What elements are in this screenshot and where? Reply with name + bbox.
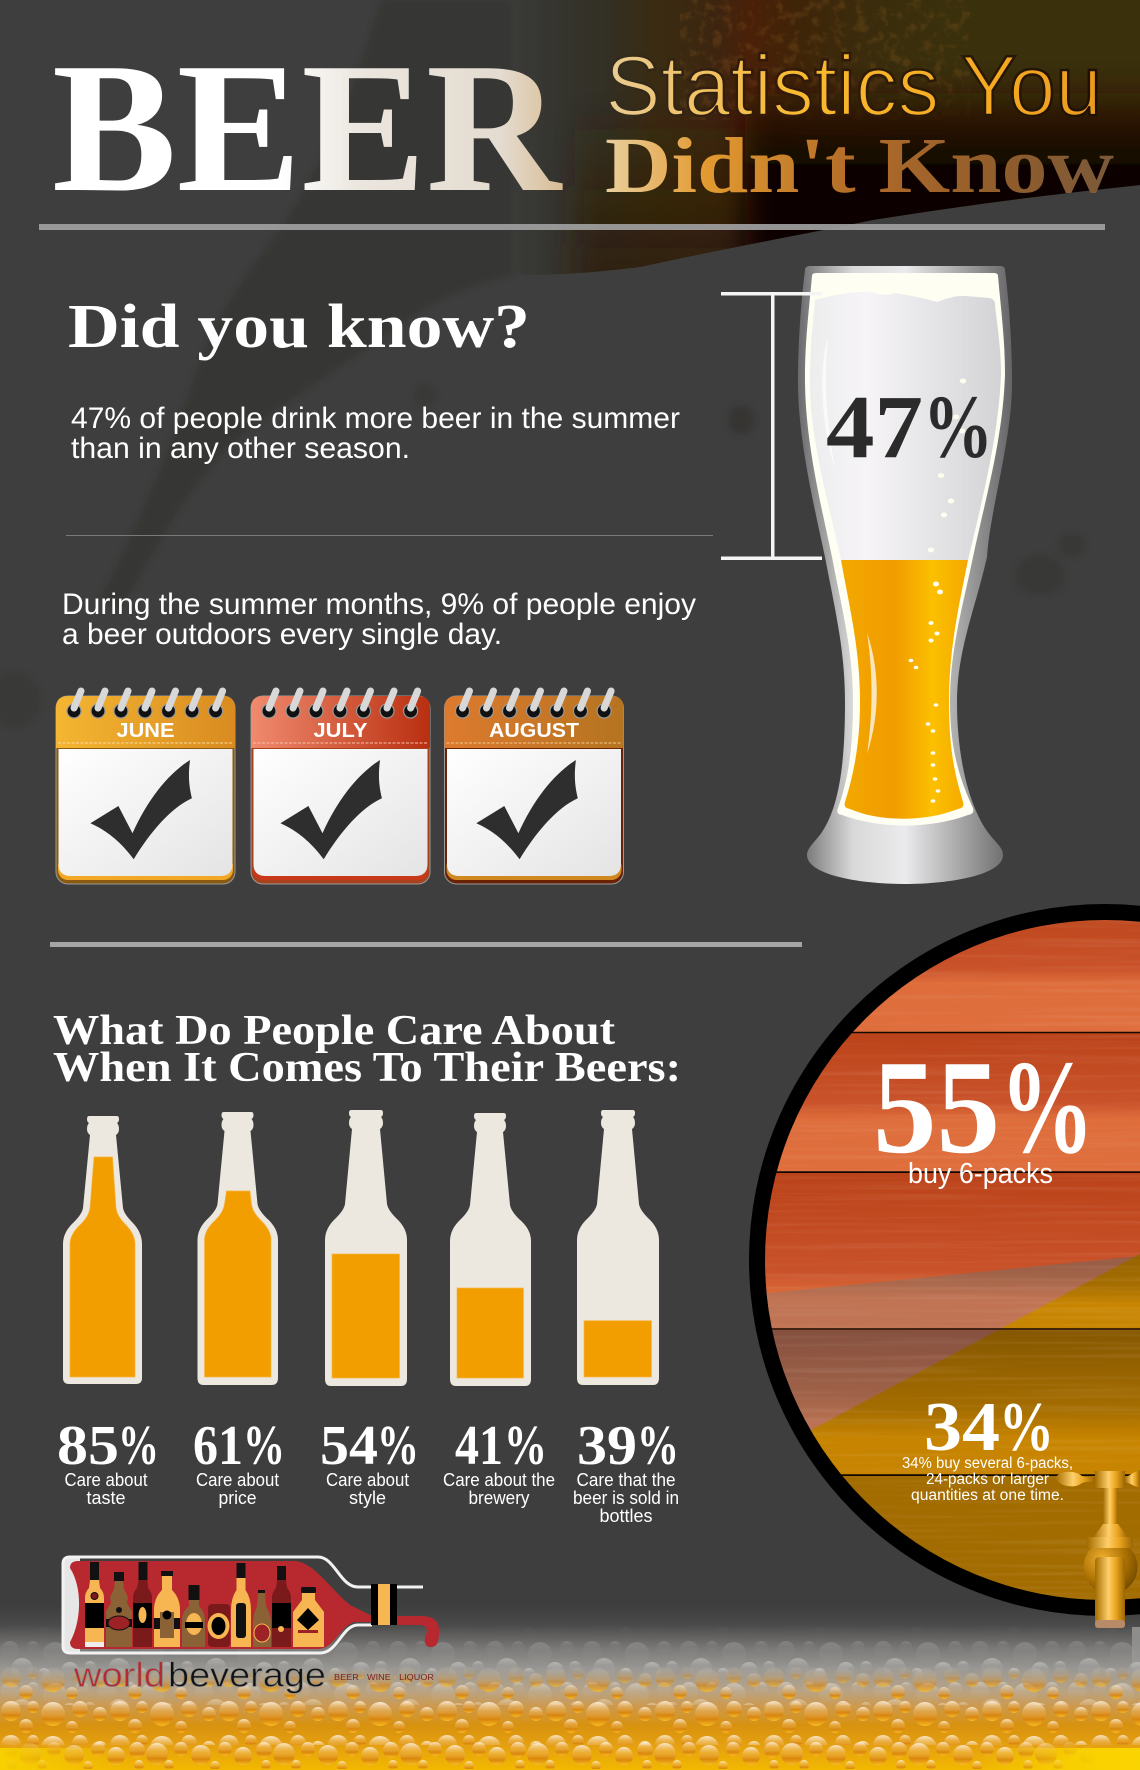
stat: 54 percent: % xyxy=(377,1415,419,1477)
title xyxy=(52,25,1114,231)
calendar: August xyxy=(444,691,624,884)
stat: 39 percent xyxy=(573,1415,679,1526)
label: 55 percent: 55 xyxy=(873,1033,1000,1181)
label: 55 percent: % xyxy=(1000,1033,1094,1181)
calendar: August: AUGUST xyxy=(489,720,579,742)
heading: Didn't Know: Didn't Know xyxy=(605,123,1114,210)
stat: 39 percent: beer is sold in xyxy=(573,1488,679,1508)
slice: gold 34 percent xyxy=(810,1254,1140,1600)
wordmark: world beverage: BEER • WINE • LIQUOR xyxy=(334,1673,434,1682)
bottle: 54 percent style xyxy=(325,1110,407,1386)
foam and bubbles at the bottom xyxy=(0,1605,1140,1770)
heading: Statistics You: Statistics You xyxy=(605,39,1102,134)
stat: 41 percent xyxy=(443,1415,555,1508)
stat: 85 percent: % xyxy=(118,1415,159,1477)
calendar: June: JUNE xyxy=(116,720,174,742)
slice: orange 55 percent xyxy=(740,904,1140,1373)
stat: 39 percent: 39 xyxy=(577,1415,637,1477)
wordmark: world beverage: beverage xyxy=(168,1657,326,1695)
bubbles xyxy=(909,378,966,803)
label: buy 6-packs: buy 6-packs xyxy=(908,1158,1053,1190)
heading: what do people care about: When It Comes To Their Beers: xyxy=(53,1045,681,1091)
calendar: June xyxy=(56,691,235,884)
text block: 47 percent summer: 47% of people drink more beer in the summer xyxy=(71,402,680,435)
stat: 54 percent xyxy=(320,1415,419,1508)
label: 47% xyxy=(826,378,993,477)
stat: 39 percent: % xyxy=(637,1415,679,1477)
stat: 41 percent: % xyxy=(504,1415,547,1477)
stat: 61 percent: price xyxy=(218,1488,256,1508)
stat: 39 percent: Care that the xyxy=(576,1470,676,1490)
bottle mark xyxy=(63,1557,439,1653)
icon: barrel tap xyxy=(1055,1470,1140,1628)
text block: 9 percent outdoors: a beer outdoors every single day. xyxy=(62,618,502,651)
background: beer pour and splash xyxy=(0,0,1140,728)
wordmark: world beverage xyxy=(73,1657,434,1695)
calendar: July xyxy=(251,691,430,884)
heading: what do people care about: What Do People Care About xyxy=(53,1008,615,1054)
label: 34 percent description: quantities at one time. xyxy=(911,1487,1064,1504)
stat: 54 percent: Care about xyxy=(326,1470,409,1490)
empty portion xyxy=(810,292,1001,560)
stat: 85 percent: 85 xyxy=(57,1415,119,1477)
chart: beer glass 47 percent xyxy=(798,266,1012,884)
stat: 41 percent: brewery xyxy=(468,1488,530,1508)
stat: 61 percent: Care about xyxy=(196,1470,279,1490)
heading: Did you know: Did you know? xyxy=(68,293,530,361)
stat: 54 percent: style xyxy=(349,1488,386,1508)
stat: 61 percent: % xyxy=(243,1415,285,1477)
panel: did you know xyxy=(62,293,713,651)
label: 47%: 47 xyxy=(826,378,923,477)
bottle: 61 percent price xyxy=(198,1112,278,1385)
label: 34 percent description: 24-packs or larger xyxy=(926,1471,1049,1488)
small bottles xyxy=(85,1562,324,1647)
bottle chart xyxy=(63,1110,659,1386)
label: 34 percent: 34 xyxy=(924,1389,1000,1466)
bottle: 85 percent taste xyxy=(63,1116,142,1384)
label: 55 percent xyxy=(873,1033,1094,1181)
wordmark: world beverage: world xyxy=(73,1657,165,1695)
stat: 61 percent: 61 xyxy=(193,1415,243,1477)
stat: 54 percent: 54 xyxy=(320,1415,378,1477)
stat: 85 percent xyxy=(57,1415,159,1508)
label: 47%: % xyxy=(923,378,993,477)
stat: 61 percent xyxy=(193,1415,285,1508)
bottle: 39 percent bottles xyxy=(577,1110,659,1385)
calendar: July: JULY xyxy=(314,720,368,742)
bottle: 41 percent brewery xyxy=(450,1113,531,1386)
text block: 9 percent outdoors: During the summer months, 9% of people enjoy xyxy=(62,588,696,621)
text block: 47 percent summer: than in any other season. xyxy=(71,432,410,465)
glass outer xyxy=(798,266,1012,884)
label: 34 percent: % xyxy=(999,1389,1054,1466)
logo: world beverage xyxy=(63,1557,439,1695)
stat: 85 percent: taste xyxy=(86,1488,126,1508)
label: 34 percent xyxy=(924,1389,1054,1466)
heading: BEER: BEER xyxy=(52,25,563,231)
bracket arrow: 47 percent xyxy=(721,292,822,560)
pie chart: barrel xyxy=(740,904,1140,1636)
stat: 41 percent: 41 xyxy=(455,1415,503,1477)
slice: remainder xyxy=(766,1256,1135,1432)
label: 34 percent description: 34% buy several 6-packs, xyxy=(902,1455,1073,1472)
beer fill xyxy=(841,560,968,819)
stat: 41 percent: Care about the xyxy=(443,1470,555,1490)
stat: 39 percent: bottles xyxy=(600,1506,652,1526)
stat: 85 percent: Care about xyxy=(64,1470,148,1490)
